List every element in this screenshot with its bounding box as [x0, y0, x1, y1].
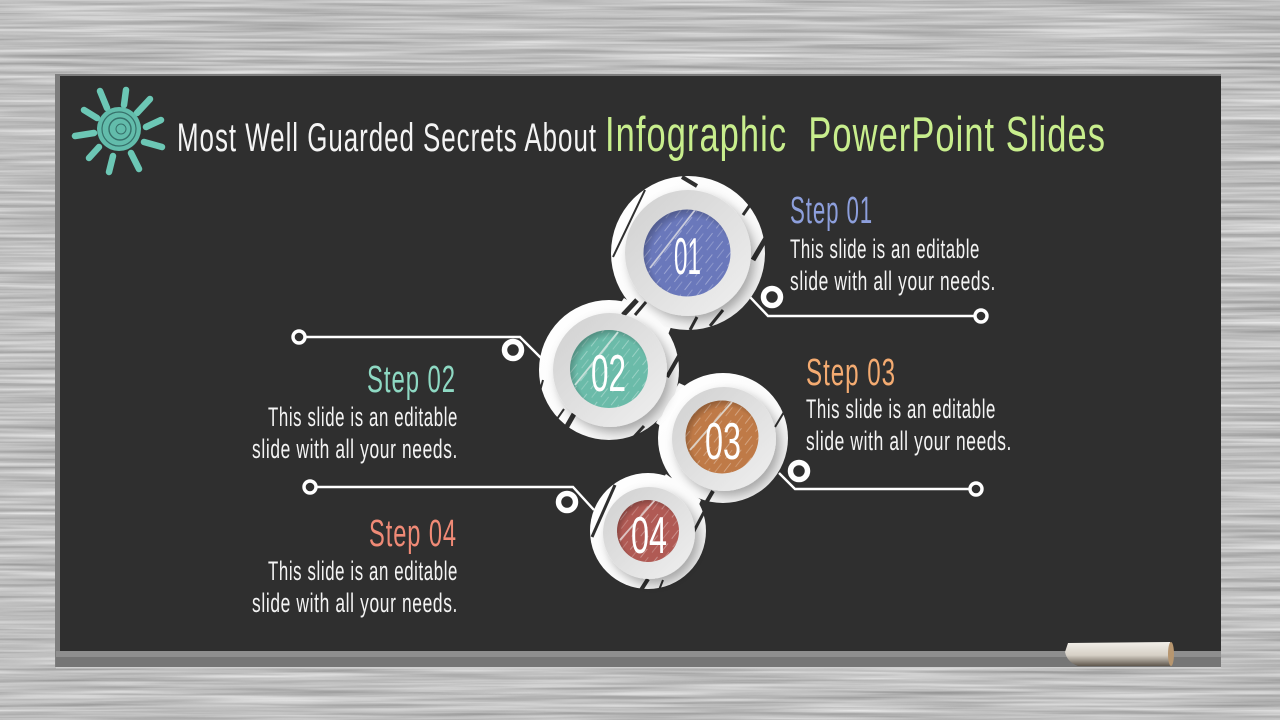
panel: chalkboard	[55, 74, 1221, 668]
connector: step 04	[304, 481, 594, 510]
text block: step 03: This slide is an editable	[806, 394, 996, 424]
text block: step 01	[790, 190, 996, 296]
text block: step 04: This slide is an editable	[268, 556, 458, 586]
step 01 badge	[625, 190, 751, 316]
step 03 badge: 03	[705, 413, 741, 471]
chalk scratches on disks	[540, 177, 784, 590]
text block: step 04: Step 04	[369, 513, 457, 555]
step 04 badge	[603, 487, 695, 579]
step 04 badge: 04	[631, 507, 667, 565]
connector: step 02	[293, 331, 541, 358]
text block: step 02: slide with all your needs.	[252, 434, 458, 464]
text block: step 03: Step 03	[806, 352, 896, 394]
chain of white disks	[539, 176, 788, 590]
text block: step 01: Step 01	[790, 190, 873, 232]
text block: step 01: slide with all your needs.	[790, 266, 996, 296]
step 03 badge	[672, 387, 776, 491]
text block: step 02	[252, 359, 458, 464]
text block: step 03: slide with all your needs.	[806, 426, 1012, 456]
text block: step 02: This slide is an editable	[268, 402, 458, 432]
text block: step 04	[252, 513, 458, 618]
title: white part: Most Well Guarded Secrets About	[177, 116, 597, 160]
step 02 badge: 02	[591, 345, 626, 403]
step 02 badge	[553, 313, 667, 427]
connector: step 03	[779, 462, 982, 495]
text block: step 03	[806, 352, 1012, 456]
text block: step 01: This slide is an editable	[790, 234, 980, 264]
text block: step 02: Step 02	[367, 359, 456, 401]
icon: chalk stick	[1065, 642, 1174, 666]
icon: chalk sun	[75, 90, 162, 172]
text block: step 04: slide with all your needs.	[252, 588, 458, 618]
connector: step 01	[750, 288, 987, 322]
title	[177, 108, 1106, 162]
step 01 badge: 01	[674, 228, 701, 286]
